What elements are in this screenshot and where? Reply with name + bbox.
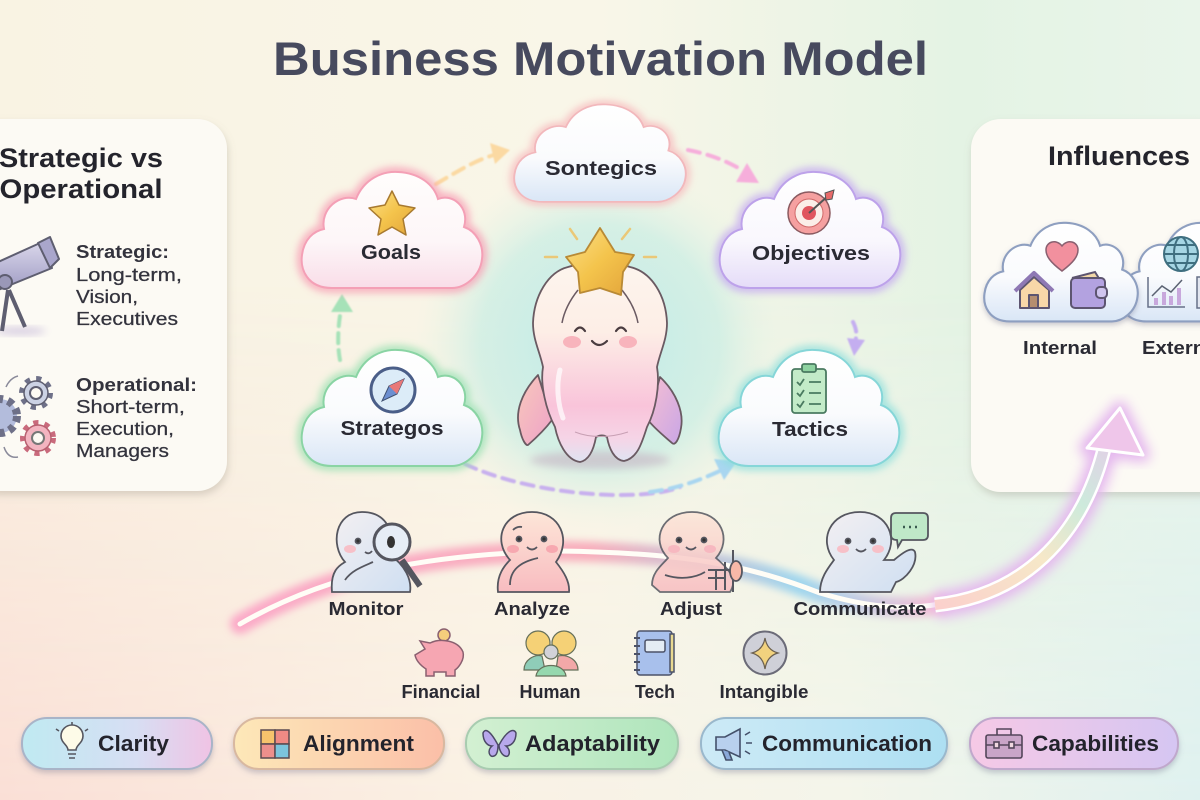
- label: alignment: Alignment: [303, 731, 415, 756]
- cloud: objectives: [720, 172, 900, 288]
- panel: influences: [971, 119, 1200, 492]
- text: strategic: Strategic:: [76, 242, 169, 262]
- label: objectives: Objectives: [752, 243, 870, 265]
- label: tech: Tech: [635, 682, 675, 702]
- heading: strategic vs operational: [0, 143, 163, 204]
- arrow: goals to strategics: [436, 143, 510, 184]
- cloud: strategies: [302, 350, 482, 466]
- icon: butterfly: [483, 731, 516, 756]
- label: monitor: Monitor: [328, 599, 404, 619]
- icon: star: [369, 191, 415, 235]
- cloud: tactics: [719, 350, 899, 466]
- arrow: strategics to objectives: [688, 150, 759, 183]
- icon: checklist: [792, 364, 826, 413]
- label: intangible: Intangible: [720, 682, 808, 702]
- icon: house: [1015, 273, 1053, 308]
- wave path: [240, 551, 940, 624]
- label: communicate: Communicate: [794, 599, 926, 619]
- icon: bulb: [56, 722, 88, 758]
- fins: [518, 375, 682, 445]
- arrow: strategies to goals: [331, 294, 353, 360]
- icon: gears: [0, 376, 53, 457]
- label: goals: Goals: [361, 242, 421, 264]
- label: financial: Financial: [402, 682, 480, 702]
- panel: strategic vs operational: [0, 119, 227, 491]
- arm lines: [562, 290, 638, 323]
- label: clarity: Clarity: [98, 731, 170, 756]
- title: Business Motivation Model: [273, 32, 928, 85]
- cloud: external: [1120, 223, 1200, 321]
- pill: capabilities: [970, 718, 1178, 769]
- cycle arrows: [331, 143, 865, 495]
- pill: clarity: [22, 718, 212, 769]
- speech bubble: [891, 513, 928, 547]
- icon: intangible: [744, 632, 786, 674]
- cloud: internal: [984, 223, 1138, 321]
- text: strategic: Long-term,: [76, 265, 182, 285]
- label: analyze: Analyze: [494, 599, 570, 619]
- icon: piggy bank: [415, 629, 463, 676]
- pill: alignment: [234, 718, 444, 769]
- tool: [708, 550, 733, 592]
- icon: telescope: [0, 237, 59, 335]
- text: strategic: Vision,: [76, 287, 138, 307]
- icon: wallet: [1071, 272, 1107, 308]
- heading: strategic vs operational: Strategic vs: [0, 143, 163, 173]
- arrow: up to influences: [935, 408, 1143, 605]
- character: analyze: [498, 512, 569, 592]
- label: internal: Internal: [1023, 338, 1097, 358]
- character: communicate: [820, 512, 928, 592]
- heading: strategic vs operational: Operational: [0, 174, 162, 204]
- text: operational: Operational:: [76, 375, 197, 395]
- star: [566, 228, 634, 295]
- icon: briefcase: [986, 729, 1022, 758]
- icon: puzzle: [261, 730, 289, 758]
- character: adjust: [652, 512, 742, 592]
- label: adjust: Adjust: [660, 599, 722, 619]
- pill: communication: [701, 718, 947, 769]
- text: operational: [76, 375, 197, 461]
- mascot with star: [518, 228, 682, 469]
- label: tactics: Tactics: [772, 419, 848, 441]
- character: monitor: [332, 512, 420, 592]
- text: strategic: Executives: [76, 309, 178, 329]
- icon: notebook: [634, 631, 674, 675]
- text: operational: Execution,: [76, 419, 174, 439]
- arrow: objectives to tactics: [847, 322, 865, 356]
- icon: chart: [1148, 277, 1185, 307]
- label: strategics: Sontegics: [545, 158, 657, 180]
- text: strategic: [76, 242, 182, 329]
- icon: megaphone: [716, 729, 752, 760]
- magnifier: [374, 524, 420, 586]
- icon: globe: [1164, 237, 1198, 271]
- face: [575, 328, 626, 345]
- cloud: strategics: [514, 104, 686, 202]
- cloud: goals: [302, 172, 482, 288]
- label: communication: Communication: [762, 731, 932, 756]
- text: operational: Short-term,: [76, 397, 185, 417]
- sparkles: [545, 229, 656, 257]
- label: capabilities: Capabilities: [1032, 731, 1159, 756]
- heading: influences: Influences: [1048, 141, 1190, 171]
- arrow: strategies to tactics: [465, 459, 737, 495]
- label: human: Human: [520, 682, 580, 702]
- text: operational: Managers: [76, 441, 169, 461]
- icon: human: [524, 631, 578, 676]
- label: strategies: Strategos: [340, 418, 444, 440]
- icon: target: [788, 190, 834, 234]
- label: adaptability: Adaptability: [525, 731, 661, 756]
- body: [533, 262, 667, 462]
- icon: compass: [371, 368, 415, 412]
- pill: adaptability: [466, 718, 678, 769]
- icon: heart: [1046, 242, 1078, 271]
